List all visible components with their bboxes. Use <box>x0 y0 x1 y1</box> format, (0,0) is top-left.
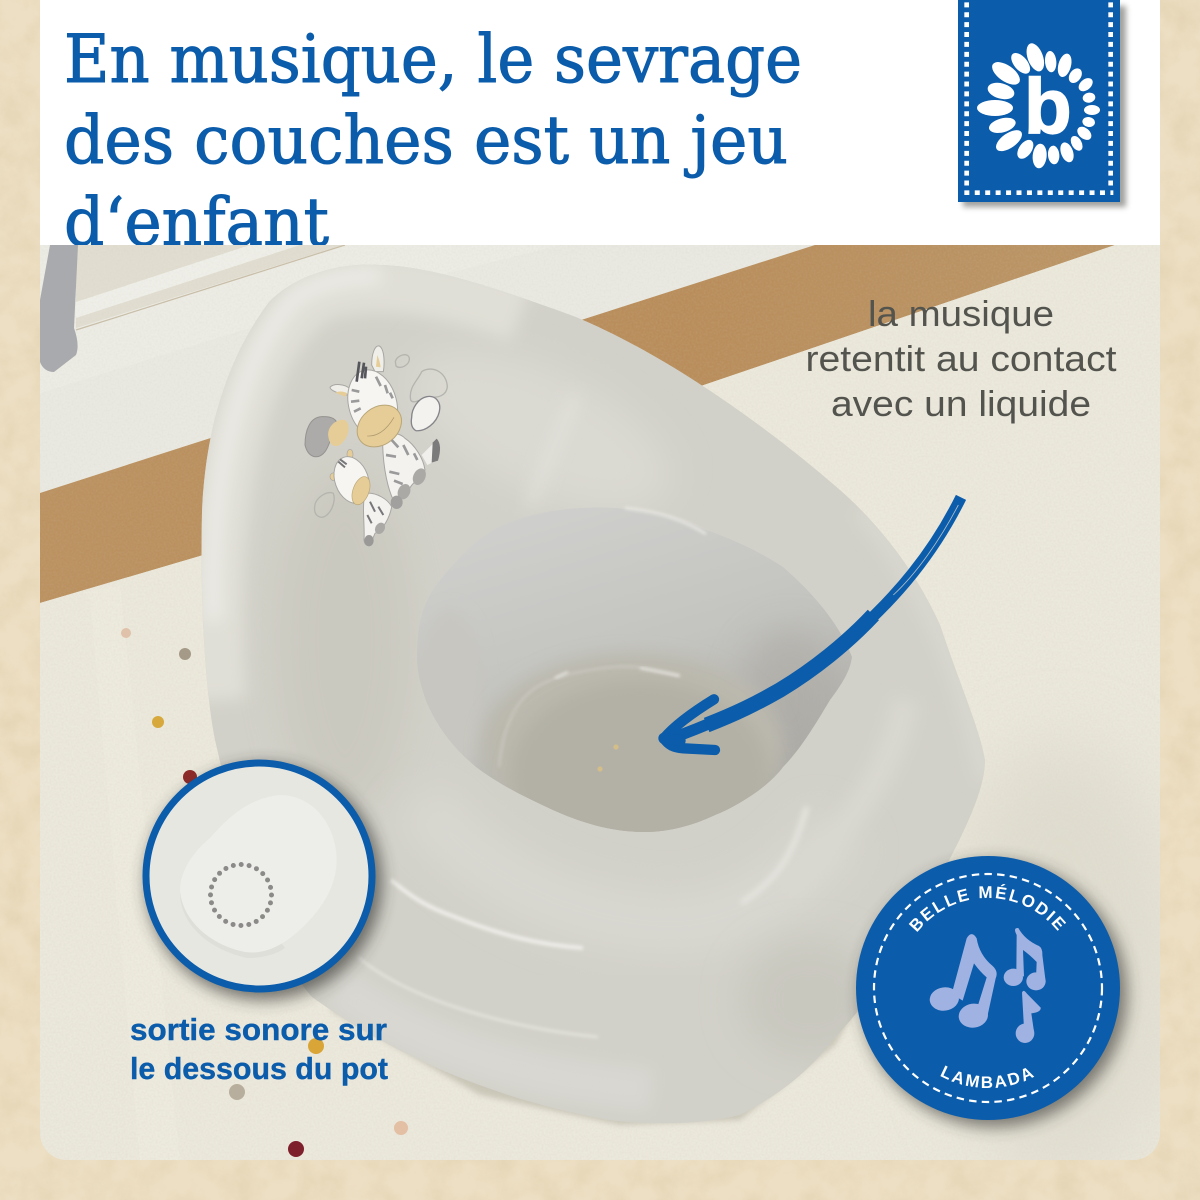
right rim band <box>860 510 985 780</box>
inset ring <box>146 763 372 989</box>
arrow: brush stroke into bowl <box>664 497 961 750</box>
badge: belle mélodie lambada <box>851 850 1138 1139</box>
bowl right shadow <box>754 636 825 718</box>
callout text: music on contact with liquid: retentit au contact <box>806 338 1116 379</box>
caption: sound outlet: le dessous du pot <box>130 1051 388 1086</box>
sound holes <box>210 864 272 926</box>
icon: music notes <box>928 928 1046 1043</box>
lower base band <box>340 990 650 1090</box>
badge top text: BELLE MÉLODIE <box>908 884 1066 932</box>
sound outlet plate edge <box>180 893 285 958</box>
back rest shading <box>298 499 392 781</box>
seat edge highlight <box>391 880 583 948</box>
title: des couches est un jeu <box>64 102 788 179</box>
front lip light <box>420 800 840 925</box>
white cloud <box>411 396 440 431</box>
left rim bright band <box>213 276 380 620</box>
grey and yellow clouds <box>305 417 337 457</box>
outline clouds <box>315 355 447 517</box>
lip streak <box>741 807 807 903</box>
inset: sound outlet underneath the potty <box>146 763 382 1000</box>
zebra decal <box>305 346 447 546</box>
basin floor <box>520 690 759 830</box>
basin <box>484 652 780 760</box>
basin sparkle <box>555 668 680 678</box>
wooden floor <box>40 245 1115 603</box>
caption: sound outlet: sortie sonore sur <box>130 1012 387 1047</box>
contact sensors <box>597 744 619 772</box>
grey cloth strap <box>40 245 78 372</box>
bowl lower left wall <box>455 736 469 758</box>
left rim wide band <box>216 285 520 700</box>
bowl top highlight <box>625 508 706 534</box>
base right darker <box>760 959 856 1041</box>
right hump <box>785 700 905 890</box>
potty bowl <box>418 508 852 832</box>
potty shadow <box>331 1010 852 1127</box>
logo: bébé brand tag <box>958 0 1126 207</box>
badge bottom text: LAMBADA <box>940 1066 1034 1088</box>
photo panel: potty on a towel <box>40 245 1180 1180</box>
callout text: music on contact with liquid: avec un liquide <box>831 383 1091 424</box>
caption: sound outlet <box>130 1012 388 1086</box>
sound outlet plate <box>180 795 337 953</box>
callout text: music on contact with liquid <box>806 293 1116 424</box>
towel coloured dots <box>121 628 408 1157</box>
logo: bébé brand tag: b <box>1024 62 1072 150</box>
title: d‘enfant <box>64 184 329 261</box>
big zebra <box>372 346 384 372</box>
potty body <box>190 255 1000 1135</box>
wall and skirting <box>40 245 1160 605</box>
callout text: music on contact with liquid: la musique <box>868 293 1054 334</box>
basin ring highlight <box>499 666 639 764</box>
title <box>64 21 802 261</box>
bowl reflection <box>530 395 576 506</box>
base edge highlight <box>358 957 598 1037</box>
small zebra <box>347 449 353 459</box>
title: En musique, le sevrage <box>64 21 802 98</box>
towel <box>40 245 1180 1180</box>
header panel: white band with title <box>40 0 1160 261</box>
back rest light <box>445 376 635 483</box>
